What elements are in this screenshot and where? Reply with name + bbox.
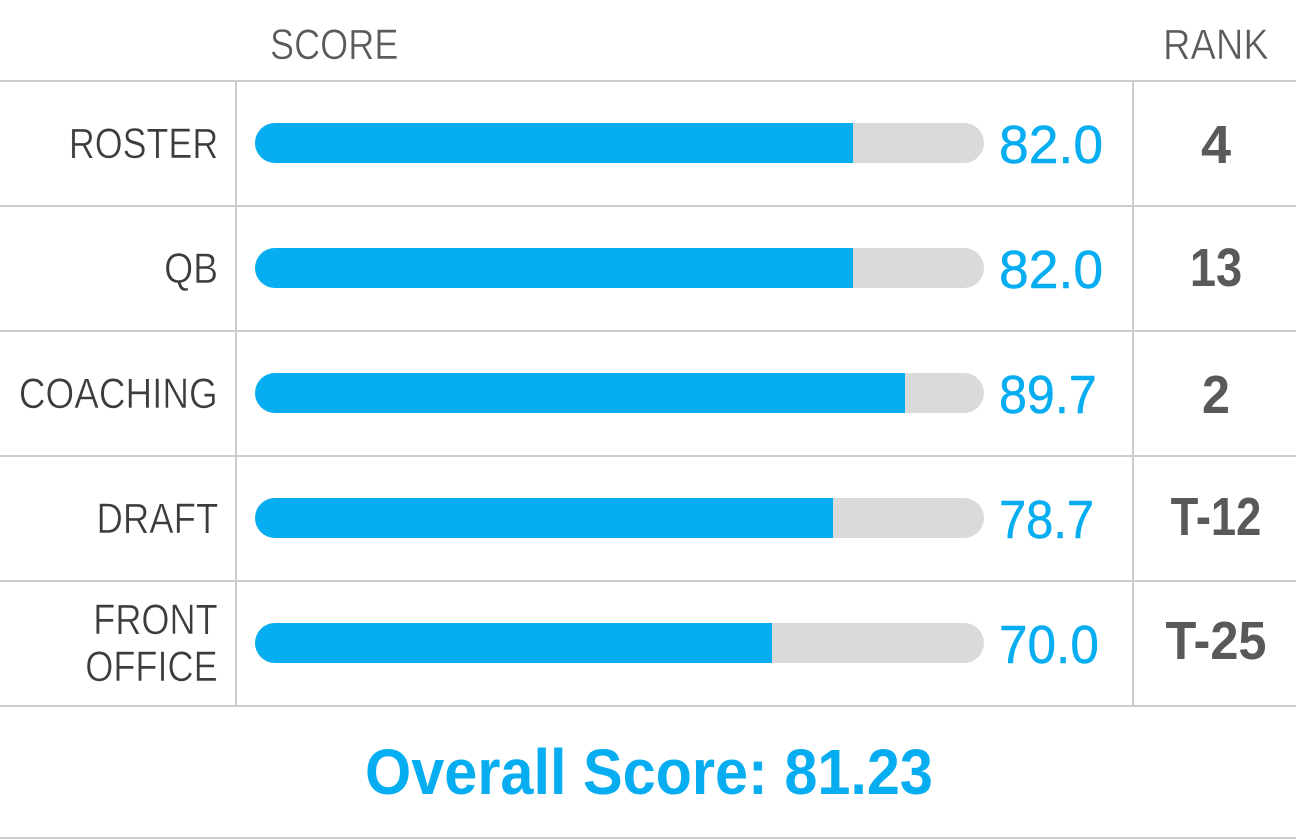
- value: QB score: 82.0: [999, 240, 1103, 300]
- rank: front office: T-25: [1165, 611, 1267, 671]
- rank: draft: T-12: [1171, 487, 1261, 547]
- rank: QB: 13: [1190, 238, 1242, 298]
- bar: front office score: [255, 623, 984, 663]
- row label: draft: DRAFT: [96, 495, 218, 543]
- value: draft score: 78.7: [999, 490, 1094, 550]
- rank: coaching: 2: [1202, 365, 1230, 425]
- value: front office score: 70.0: [999, 615, 1099, 675]
- bar: roster score: [255, 123, 984, 163]
- value: coaching score: 89.7: [999, 365, 1097, 425]
- row label: front office: [86, 596, 218, 691]
- heading: score column: SCORE: [270, 21, 398, 69]
- value: roster score: 82.0: [999, 115, 1103, 175]
- bar: draft score: [255, 498, 984, 538]
- rank: roster: 4: [1201, 115, 1231, 175]
- row label: front office: OFFICE: [86, 643, 218, 691]
- heading: rank column: RANK: [1163, 21, 1269, 69]
- overall score: Overall Score: 81.23: [365, 736, 933, 808]
- row label: coaching: COACHING: [19, 370, 218, 418]
- row label: front office: FRONT: [94, 596, 218, 644]
- bar: QB score: [255, 248, 984, 288]
- row label: roster: ROSTER: [69, 120, 218, 168]
- bar: coaching score: [255, 373, 984, 413]
- row label: QB: QB: [164, 245, 218, 293]
